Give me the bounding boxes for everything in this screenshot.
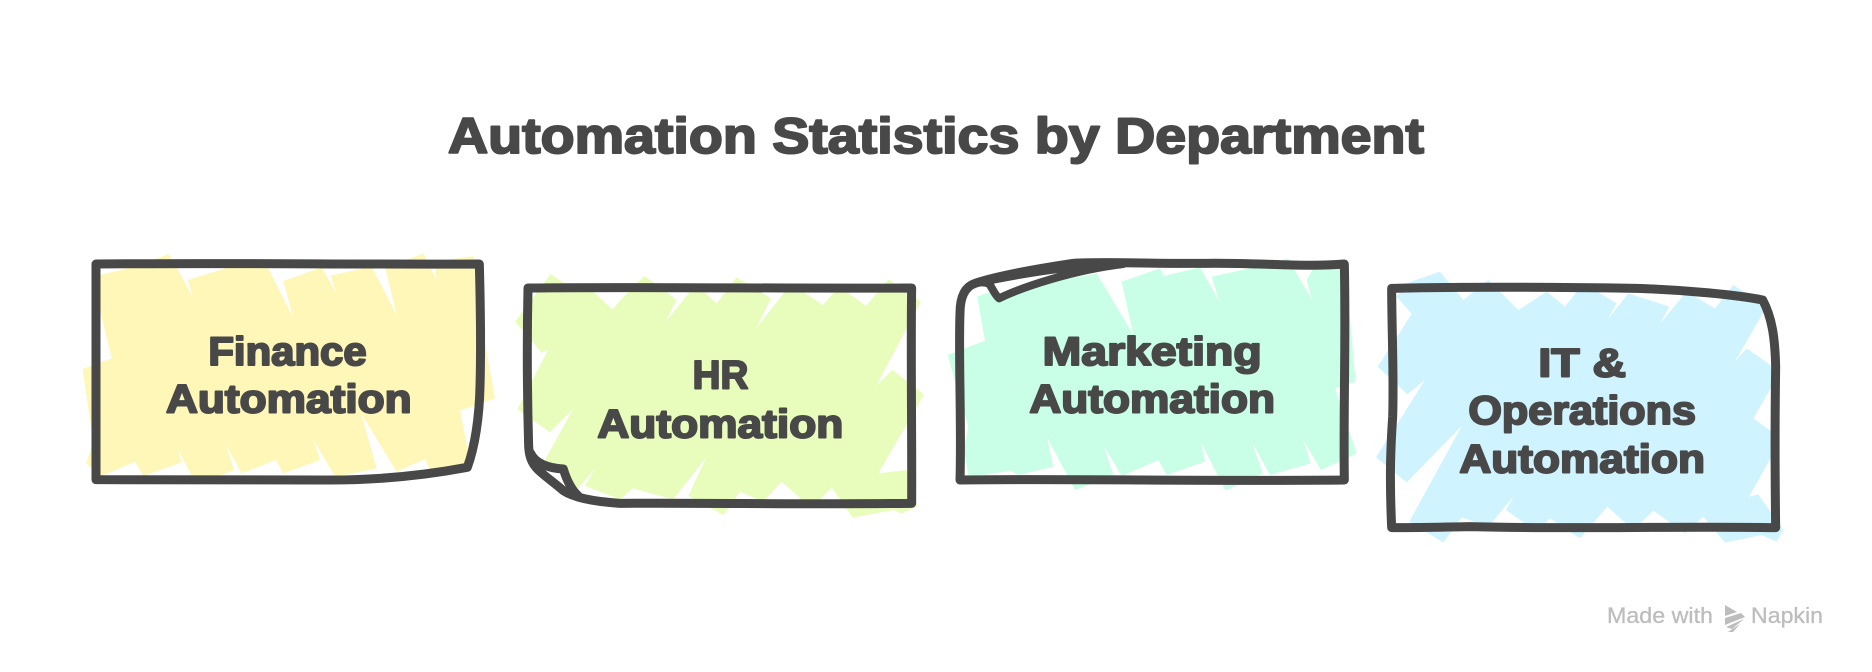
label: Marketing — [1043, 330, 1262, 374]
label — [597, 353, 843, 446]
label: Automation — [597, 402, 843, 446]
green scribble fill — [515, 274, 924, 518]
label: Operations — [1468, 389, 1696, 433]
watermark: made with napkin: Napkin — [1751, 603, 1823, 628]
label: IT & — [1538, 342, 1626, 386]
panel: hr automation — [515, 274, 924, 518]
sketched outline with folded corner — [527, 288, 912, 504]
watermark: made with napkin — [1607, 603, 1823, 632]
label — [166, 330, 412, 422]
icon: napkin logo — [1725, 605, 1745, 632]
panel: marketing automation — [948, 258, 1357, 491]
label — [1459, 342, 1705, 481]
panel: it and operations automation — [1376, 272, 1783, 543]
panel: finance automation — [83, 253, 495, 485]
blue scribble fill — [1376, 272, 1783, 543]
yellow scribble fill — [83, 253, 495, 485]
sketched outline — [1390, 287, 1776, 528]
watermark: made with napkin: Made with — [1607, 603, 1713, 628]
label: Automation — [1459, 437, 1705, 481]
mint scribble fill — [948, 258, 1357, 491]
label: Automation — [1029, 378, 1275, 422]
sketched outline — [96, 264, 480, 480]
label — [1029, 330, 1275, 422]
label: Automation — [166, 378, 412, 422]
label: Finance — [208, 330, 367, 374]
sketched outline with folded corner — [960, 263, 1345, 480]
label: HR — [693, 353, 748, 397]
title: Automation Statistics by Department — [448, 108, 1424, 164]
